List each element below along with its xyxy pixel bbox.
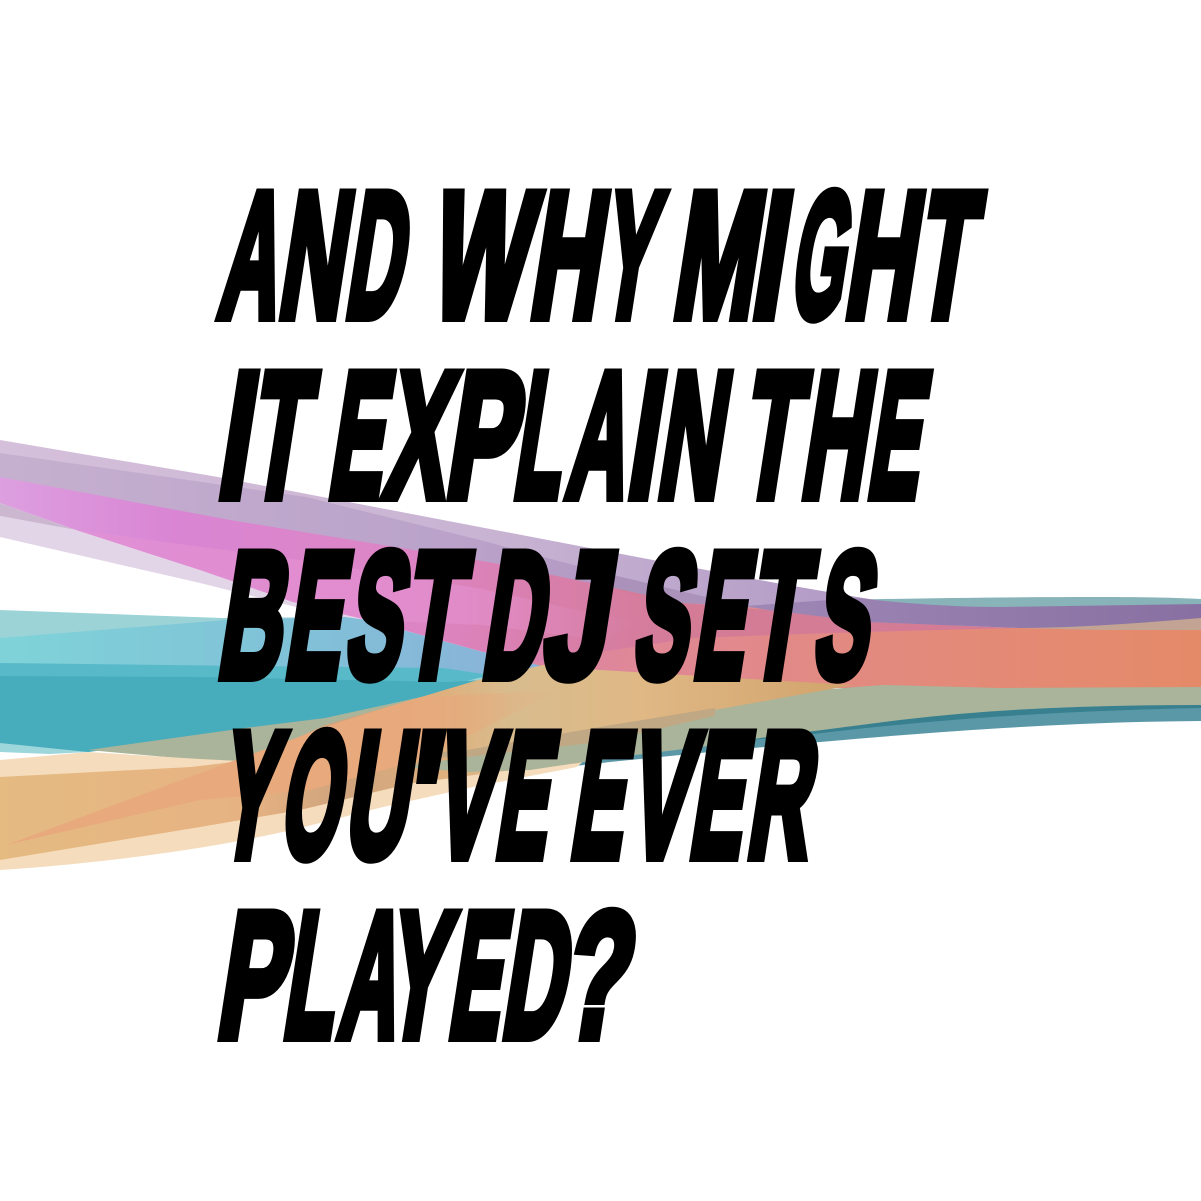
title line 3: E xyxy=(277,515,363,714)
ribbon: tan-pink sliver at right xyxy=(1018,618,1201,630)
title line 3: B xyxy=(209,515,304,714)
ribbon: lighter pink overlay xyxy=(76,530,640,640)
title line 5: A xyxy=(331,875,419,1074)
title line 5: L xyxy=(275,875,356,1074)
title line 4: E xyxy=(487,695,569,894)
ribbon: orange wedge xyxy=(6,690,560,845)
title: and why might it explain the best dj sets you've ever played? xyxy=(209,155,992,1074)
title line 2: I xyxy=(619,335,677,534)
title line 2: T xyxy=(241,335,326,534)
ribbon: grey lilac wedge xyxy=(0,503,76,530)
ribbon: dark teal body xyxy=(0,676,483,752)
title line 4: ' xyxy=(395,695,455,894)
ribbon: tan main band xyxy=(0,665,853,860)
title line 5: Y xyxy=(377,875,465,1074)
ribbon: mid lavender strand xyxy=(0,453,800,625)
ribbons: flowing colour bands xyxy=(0,440,1201,870)
ribbon: pink magenta strand xyxy=(0,477,693,663)
title line 4: V xyxy=(619,695,711,894)
ribbon: light lavender upper strand xyxy=(0,440,1000,640)
title line 1: T xyxy=(908,155,992,354)
title line 2: I xyxy=(209,335,270,534)
ribbon: blue-teal mid band xyxy=(0,617,560,678)
title line 5: P xyxy=(209,875,306,1074)
title line 1: G xyxy=(782,155,865,354)
ribbon: teal top edge at right xyxy=(840,597,1201,609)
title line 3 xyxy=(209,515,890,714)
ribbon: dark teal sliver xyxy=(660,704,1201,745)
title line 5: ? xyxy=(554,875,649,1074)
ribbon: dull tan strip xyxy=(330,708,715,760)
title line 4: Y xyxy=(210,695,295,894)
title line 4: O xyxy=(272,695,361,894)
title line 3: T xyxy=(740,515,825,714)
title line 2: P xyxy=(437,335,537,534)
ribbon: pale lilac lower strand xyxy=(0,516,367,620)
title line 1: N xyxy=(270,155,365,354)
title line 3: S xyxy=(337,515,423,714)
title line 5: D xyxy=(494,875,586,1074)
title line 4 xyxy=(210,695,831,894)
title line 1: A xyxy=(211,155,300,354)
title line 4: V xyxy=(424,695,516,894)
title line 3: S xyxy=(805,515,890,714)
title line 1: H xyxy=(836,155,936,354)
ribbon: teal lower mid band xyxy=(0,663,490,686)
ribbon: lower sage overlay xyxy=(400,705,760,772)
ribbon: teal lower strand to right xyxy=(540,703,1201,770)
title line 2: L xyxy=(505,335,583,534)
title line 3: S xyxy=(625,515,710,714)
title line 1 xyxy=(211,155,992,354)
title line 4: E xyxy=(562,695,646,894)
title line 4: U xyxy=(336,695,429,894)
ribbon: rose band xyxy=(600,585,1018,650)
title line 5 xyxy=(209,875,649,1074)
title line 3: D xyxy=(474,515,564,714)
ribbon: purple band xyxy=(745,598,1201,628)
ribbon: teal light top xyxy=(0,610,560,690)
title line 1: Y xyxy=(592,155,674,354)
title line 2: H xyxy=(793,335,887,534)
title line 1: W xyxy=(422,155,549,354)
ribbon: coral central band xyxy=(430,585,1201,692)
title line 2: N xyxy=(649,335,743,534)
ribbon: pale tan bottom strand xyxy=(0,752,590,870)
title line 1: H xyxy=(521,155,621,354)
title line 2 xyxy=(209,335,941,534)
title line 5: E xyxy=(440,875,522,1074)
ribbon: purple strip xyxy=(600,572,760,608)
title line 2: E xyxy=(859,335,941,534)
title line 1: I xyxy=(743,155,804,354)
title line 3: T xyxy=(395,515,480,714)
title line 2: T xyxy=(733,335,818,534)
title line 3: J xyxy=(534,515,629,714)
title line 2: X xyxy=(376,335,468,534)
title line 2: A xyxy=(559,335,648,534)
title line 4: E xyxy=(681,695,765,894)
ribbon: pale teal under band xyxy=(0,740,150,754)
title line 3: E xyxy=(685,515,766,714)
title line 1: D xyxy=(337,155,424,354)
title line 4: R xyxy=(739,695,831,894)
title line 1: M xyxy=(664,155,777,354)
title line 2: E xyxy=(320,335,405,534)
ribbon: sage band xyxy=(88,685,1201,772)
